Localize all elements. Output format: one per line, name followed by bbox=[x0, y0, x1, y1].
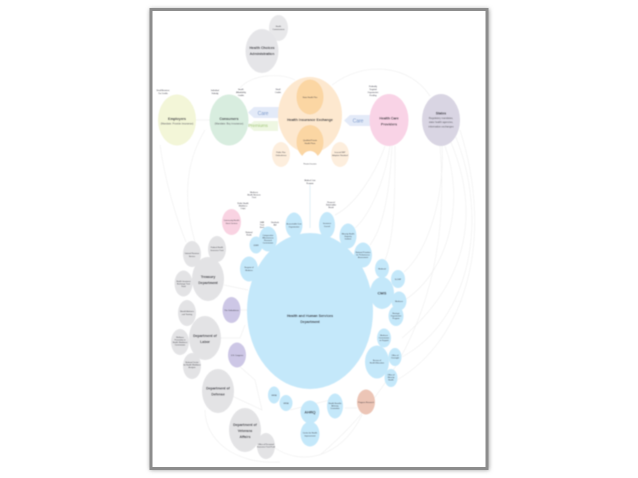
Medicaid program label: Program bbox=[306, 182, 314, 185]
medicare commission: Commission bbox=[379, 338, 389, 340]
Health Choices Administration bubble bbox=[246, 29, 278, 73]
small uncircled labels: Board bbox=[328, 206, 334, 209]
diagram content bbox=[157, 15, 475, 462]
Medicaid program label bbox=[304, 179, 316, 185]
Department of Labor group: and Training bbox=[182, 313, 192, 316]
Care arrow right bbox=[344, 115, 372, 126]
payment organization: Program bbox=[392, 317, 400, 320]
CBO purple bubble: U.S. Congress bbox=[231, 354, 243, 357]
Employers bubble: Tax Credits bbox=[158, 92, 168, 95]
Consumers bubble: Credits bbox=[275, 91, 281, 94]
medicare: Medicare bbox=[395, 300, 403, 303]
Health Choices Commissioner bubble: Commissioner bbox=[272, 28, 285, 31]
health benefits advisory committee: Health Benefits bbox=[329, 402, 341, 405]
Office of Personnel bubble bbox=[257, 433, 275, 459]
Consumers bubble: Health bbox=[238, 88, 244, 91]
national priorities bbox=[354, 242, 372, 268]
center for quality improvement: Improvement bbox=[304, 434, 316, 438]
national priorities: Assessment bbox=[358, 256, 369, 259]
Consumers bubble: Small bbox=[276, 89, 281, 91]
small uncircled labels: Medicare bbox=[250, 191, 258, 194]
Care arrow left: Care bbox=[258, 111, 269, 117]
Treasury Department group bbox=[174, 236, 226, 301]
HRSA bbox=[280, 395, 292, 411]
HRSA: HRSA bbox=[283, 402, 289, 405]
Health Insurance Exchange bubble: Health Plans bbox=[305, 142, 315, 145]
Salmon bubble: Program Research bbox=[358, 401, 374, 404]
national priorities: for Performance bbox=[356, 254, 370, 256]
connector lines bbox=[160, 69, 475, 462]
Treasury Department group: Health Insurance bbox=[176, 280, 191, 283]
minority health: Disparity bbox=[344, 235, 352, 238]
Department of Veterans Affairs bubble: Affairs bbox=[239, 435, 251, 439]
office of oversight bbox=[388, 348, 402, 366]
payment organization: Organization bbox=[391, 314, 401, 318]
HHS satellite bubbles bbox=[240, 212, 406, 446]
medicare bbox=[392, 292, 406, 310]
Department of Labor group: Health Workforce bbox=[173, 341, 187, 344]
health benefits advisory committee: Advisory bbox=[331, 404, 339, 408]
medicare commission: Medicare bbox=[380, 334, 388, 337]
States bubble: Regulatory mandates, bbox=[429, 117, 454, 120]
Health and Human Services Department bubble: Health and Human Services bbox=[287, 314, 333, 318]
small uncircled labels: Public Health bbox=[237, 202, 249, 205]
Health Care Providers bubble: Providers bbox=[381, 122, 397, 126]
bureau of administration: Health Education bbox=[370, 362, 384, 364]
office of minority health: Office of bbox=[387, 374, 395, 376]
Department of Labor group: National Center bbox=[185, 361, 199, 364]
Health Insurance Exchange bubble: Qualified Private bbox=[303, 139, 317, 142]
comparative effectiveness: Commission bbox=[263, 242, 273, 244]
small uncircled labels: Aid bbox=[274, 224, 276, 226]
insured standard bubble: Insured SNP bbox=[335, 151, 346, 154]
small uncircled labels: Trust bbox=[260, 224, 265, 226]
HHSA: HHSA bbox=[271, 394, 277, 397]
Employers bubble: Employers bbox=[168, 117, 186, 121]
small uncircled labels: Health Services bbox=[247, 194, 261, 196]
side bubbles of exchange bbox=[272, 142, 290, 167]
Employers bubble: (Mandate: Provide insurance) bbox=[161, 122, 194, 126]
Consumers bubble: Individual bbox=[211, 90, 220, 92]
Private Insurers bubble: Private Insurers bbox=[303, 162, 317, 166]
Health Care Providers bubble: Funding bbox=[370, 95, 376, 97]
AHRQ bbox=[300, 400, 320, 424]
Consumers bubble bbox=[210, 88, 281, 146]
bureau of administration bbox=[365, 346, 389, 378]
comparative effectiveness bbox=[259, 226, 277, 252]
minority health bbox=[340, 224, 356, 248]
office of minority health: Health bbox=[388, 378, 394, 382]
CHIP bbox=[391, 270, 405, 288]
surgeon general bbox=[240, 256, 258, 282]
Department of Defense bubble bbox=[202, 369, 234, 413]
Consumers bubble: Subsidy bbox=[212, 93, 218, 95]
medicaid: Medicaid bbox=[378, 268, 386, 270]
Department of Defense bubble: Defense bbox=[211, 392, 225, 396]
CMHS bbox=[250, 236, 262, 254]
Treasury Department group: Department bbox=[198, 281, 219, 285]
Private Insurers bubble bbox=[300, 151, 320, 175]
Health Care Providers bubble bbox=[368, 85, 408, 146]
Consumers bubble: (Mandate: Buy insurance) bbox=[215, 122, 243, 126]
Health Choices Administration bubble: Administration bbox=[250, 52, 274, 56]
Premiums arrow bbox=[248, 121, 278, 131]
Department of Veterans Affairs bubble: Department of bbox=[233, 423, 258, 427]
Health Insurance Exchange bubble: State Health Plan bbox=[303, 96, 317, 99]
Health Insurance Exchange bubble bbox=[278, 77, 342, 159]
center for quality improvement: Center for Health bbox=[303, 432, 317, 434]
CBO purple bubble bbox=[228, 342, 246, 368]
States bubble bbox=[422, 94, 460, 146]
Department of Veterans Affairs bubble: Veterans bbox=[238, 429, 252, 433]
Department of Labor group: for Health Workforce bbox=[183, 364, 201, 366]
Treasury Department group: Insurance Trust bbox=[210, 249, 224, 252]
comparative effectiveness: Research bbox=[264, 239, 272, 242]
Health Care Providers bubble: Organization bbox=[368, 91, 378, 94]
Health Choices Commissioner bubble bbox=[269, 15, 288, 41]
surgeon general: Medicine bbox=[245, 270, 253, 272]
small uncircled labels: Financial bbox=[327, 202, 335, 204]
Salmon bubble bbox=[357, 390, 375, 414]
payment organization bbox=[388, 306, 404, 326]
Treasury Department group: Federal Health bbox=[211, 246, 223, 249]
Purple bubbles: The Ombudsman bbox=[224, 310, 239, 312]
Health Care Providers bubble: Health Care bbox=[379, 116, 399, 120]
Treasury Department group: Treasury bbox=[201, 275, 215, 279]
States bubble: state health agencies, bbox=[429, 121, 453, 124]
States bubble: information exchanges bbox=[428, 126, 454, 128]
Office of Personnel bubble: Insurance Trust Fund bbox=[257, 446, 275, 448]
Health Care Providers bubble: Federally bbox=[369, 85, 377, 88]
pink community health bubble: Community Health bbox=[224, 219, 239, 222]
Care arrow left bbox=[248, 107, 279, 118]
medicare commission bbox=[377, 328, 391, 348]
Department of Labor group: Labor bbox=[200, 340, 210, 344]
accountable care bbox=[286, 212, 302, 238]
small uncircled labels: GME bbox=[260, 222, 265, 224]
small uncircled labels: Funds bbox=[246, 234, 252, 236]
Health Choices Commissioner bubble: Health bbox=[276, 25, 281, 28]
office of oversight: Oversight bbox=[391, 356, 400, 360]
Consumers bubble: Consumers bbox=[219, 117, 239, 121]
Consumers bubble: Affordability bbox=[236, 91, 246, 94]
Treasury Department group: Fund bbox=[181, 286, 186, 288]
Care arrow right: Care bbox=[353, 118, 364, 124]
Office of Personnel bubble: Office of Personnel bbox=[258, 443, 275, 446]
surgeon general: Surgeon of bbox=[244, 266, 254, 269]
small uncircled labels: Graduate bbox=[271, 221, 279, 224]
health benefits advisory committee bbox=[327, 394, 343, 418]
small uncircled labels: Trust bbox=[252, 196, 257, 199]
Employers bubble bbox=[157, 90, 196, 146]
Department of Labor group bbox=[171, 300, 221, 379]
Health and Human Services Department bubble bbox=[247, 233, 373, 389]
side bubbles of exchange: Public Plan bbox=[276, 152, 286, 154]
comparative effectiveness: Effectiveness bbox=[262, 236, 274, 240]
insurance council bbox=[319, 212, 335, 238]
Department of Veterans Affairs bubble bbox=[229, 408, 261, 452]
health benefits advisory committee: Committee bbox=[330, 407, 340, 410]
Department of Labor group: Prevention in bbox=[174, 338, 186, 342]
Department of Labor group: Benefit Advisors bbox=[180, 310, 194, 313]
insurance council: Council bbox=[324, 226, 331, 228]
accountable care: Accountable Care bbox=[286, 222, 302, 226]
accountable care: Organization bbox=[289, 226, 299, 228]
Treasury Department group: Service bbox=[189, 255, 195, 258]
insured standard bubble: Adoption Standard bbox=[332, 154, 348, 157]
minority health: Minority Health bbox=[342, 232, 354, 236]
CHIP: S-CHIP bbox=[395, 279, 402, 281]
insured standard bubble bbox=[331, 142, 349, 167]
side bubbles of exchange: Ombudsman bbox=[276, 155, 286, 157]
small uncircled labels: National bbox=[246, 231, 253, 234]
Treasury Department group: Exchange Trust bbox=[177, 282, 191, 286]
center for quality improvement bbox=[300, 422, 320, 446]
Department of Labor group: Wellness bbox=[176, 337, 184, 339]
Health Care Providers bubble: Targeted bbox=[369, 88, 377, 91]
Health Insurance Exchange bubble: Health Insurance Exchange bbox=[287, 118, 333, 122]
pink community health bubble: Grant Centers bbox=[226, 222, 237, 225]
small uncircled labels: Stakeholder bbox=[326, 204, 336, 206]
pink community health bubble bbox=[222, 209, 241, 235]
Department of Labor group: Analysis bbox=[188, 366, 196, 369]
payment organization: Strategic bbox=[392, 312, 400, 315]
AHRQ: AHRQ bbox=[304, 410, 316, 414]
bureau of administration: Bureau of bbox=[373, 359, 382, 362]
Employers bubble: Small Business bbox=[157, 90, 170, 92]
medicaid bbox=[375, 259, 389, 278]
national priorities: National Priorities bbox=[356, 251, 370, 254]
small uncircled labels: Workforce bbox=[239, 204, 247, 208]
frame shadow bbox=[150, 9, 489, 470]
Consumers bubble: Credits bbox=[238, 94, 244, 97]
Department of Labor group: Department of bbox=[193, 334, 218, 338]
Medicaid program label: Medical Care bbox=[304, 179, 316, 182]
minority health: Institute bbox=[345, 238, 351, 240]
Department of Defense bubble: Department of bbox=[206, 386, 231, 390]
small uncircled labels bbox=[237, 191, 336, 236]
States bubble: States bbox=[436, 112, 446, 116]
frame bbox=[151, 10, 487, 468]
Health and Human Services Department bubble: Department bbox=[300, 320, 321, 324]
small uncircled labels: Fund bbox=[260, 227, 264, 229]
Treasury Department group: Internal Revenue bbox=[185, 252, 199, 255]
Purple bubbles bbox=[222, 297, 240, 323]
insurance council: Insurance bbox=[323, 222, 331, 225]
comparative effectiveness: Comparative bbox=[263, 234, 273, 237]
small uncircled labels: Corps bbox=[240, 207, 246, 210]
HHSA bbox=[268, 386, 280, 404]
CMS bbox=[370, 277, 394, 309]
medicare commission: on Support bbox=[379, 339, 389, 342]
Health Choices Administration bubble: Health Choices bbox=[249, 46, 275, 50]
office of minority health: Minority bbox=[388, 376, 394, 379]
office of minority health bbox=[384, 369, 398, 387]
office of oversight: Office of bbox=[391, 355, 399, 357]
Premiums arrow: Premiums bbox=[248, 123, 269, 128]
Department of Labor group: Commission bbox=[175, 344, 185, 346]
CMS: CMS bbox=[378, 290, 387, 296]
CMHS: CDER bbox=[253, 245, 259, 247]
